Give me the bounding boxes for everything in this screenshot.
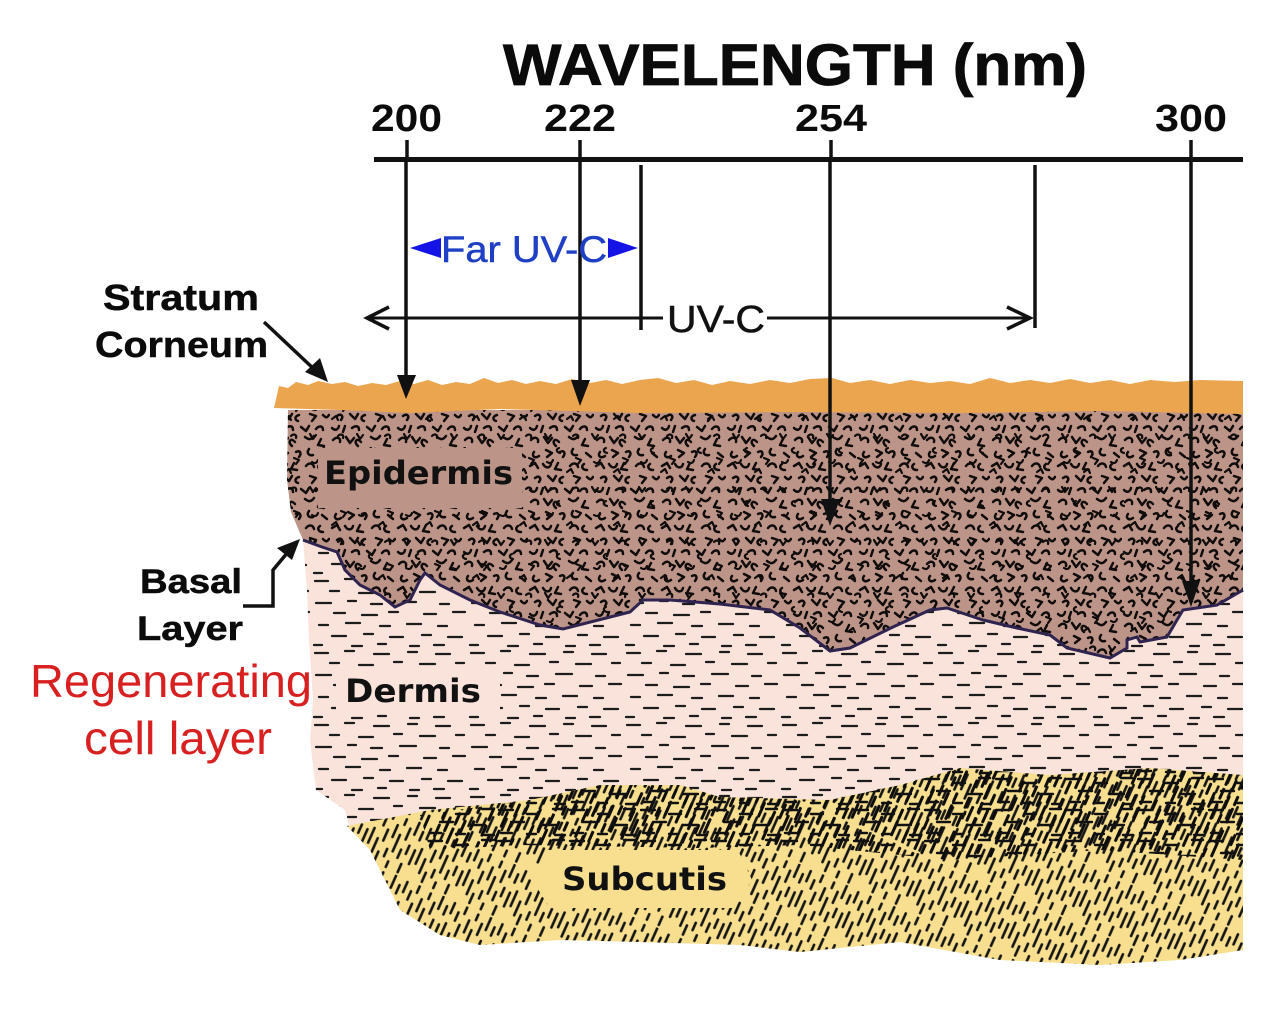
arrow: 254 nm [821,162,840,526]
pointer to stratum corneum [264,322,328,382]
label: Dermis [336,668,500,714]
layer: subcutis [340,760,1250,970]
UV-C range [367,165,1035,341]
label: Subcutis: Subcutis [562,860,727,898]
UV-C label: UV-C [667,299,765,341]
layer: stratum corneum [274,378,1243,414]
title: WAVELENGTH (nm) [503,33,1087,98]
axis label 300: 300 [1155,98,1227,140]
axis label 222: 222 [544,98,616,140]
annotation: regenerating cell layer [30,655,312,764]
label: Stratum Corneum [95,277,328,382]
annotation: regenerating cell layer: cell layer [84,712,272,764]
label: Subcutis [532,850,752,908]
layer: dermis [290,530,1250,840]
label: Epidermis [318,448,522,508]
label: Dermis: Dermis [345,672,481,710]
layer: epidermis [280,405,1250,665]
axis label 254: 254 [795,98,867,140]
label: Stratum Corneum: Stratum [103,277,259,318]
basal layer line [303,540,1243,658]
far UV-C range [410,165,641,330]
skin layers diagram [274,378,1250,970]
arrow: 222 nm [571,162,590,406]
label: Basal Layer: Layer [137,610,243,648]
label: Basal Layer: Basal [140,563,242,601]
annotation: regenerating cell layer: Regenerating [30,655,312,707]
arrow: 200 nm [397,162,416,399]
far UV-C label: Far UV-C [441,229,607,270]
pointer to basal layer [243,539,300,606]
wavelength axis [371,98,1243,162]
axis label 200: 200 [371,98,442,140]
label: Epidermis: Epidermis [324,454,513,492]
arrow: 300 nm [1182,162,1200,607]
label: Stratum Corneum: Corneum [95,324,268,365]
label: Basal Layer [137,539,300,648]
